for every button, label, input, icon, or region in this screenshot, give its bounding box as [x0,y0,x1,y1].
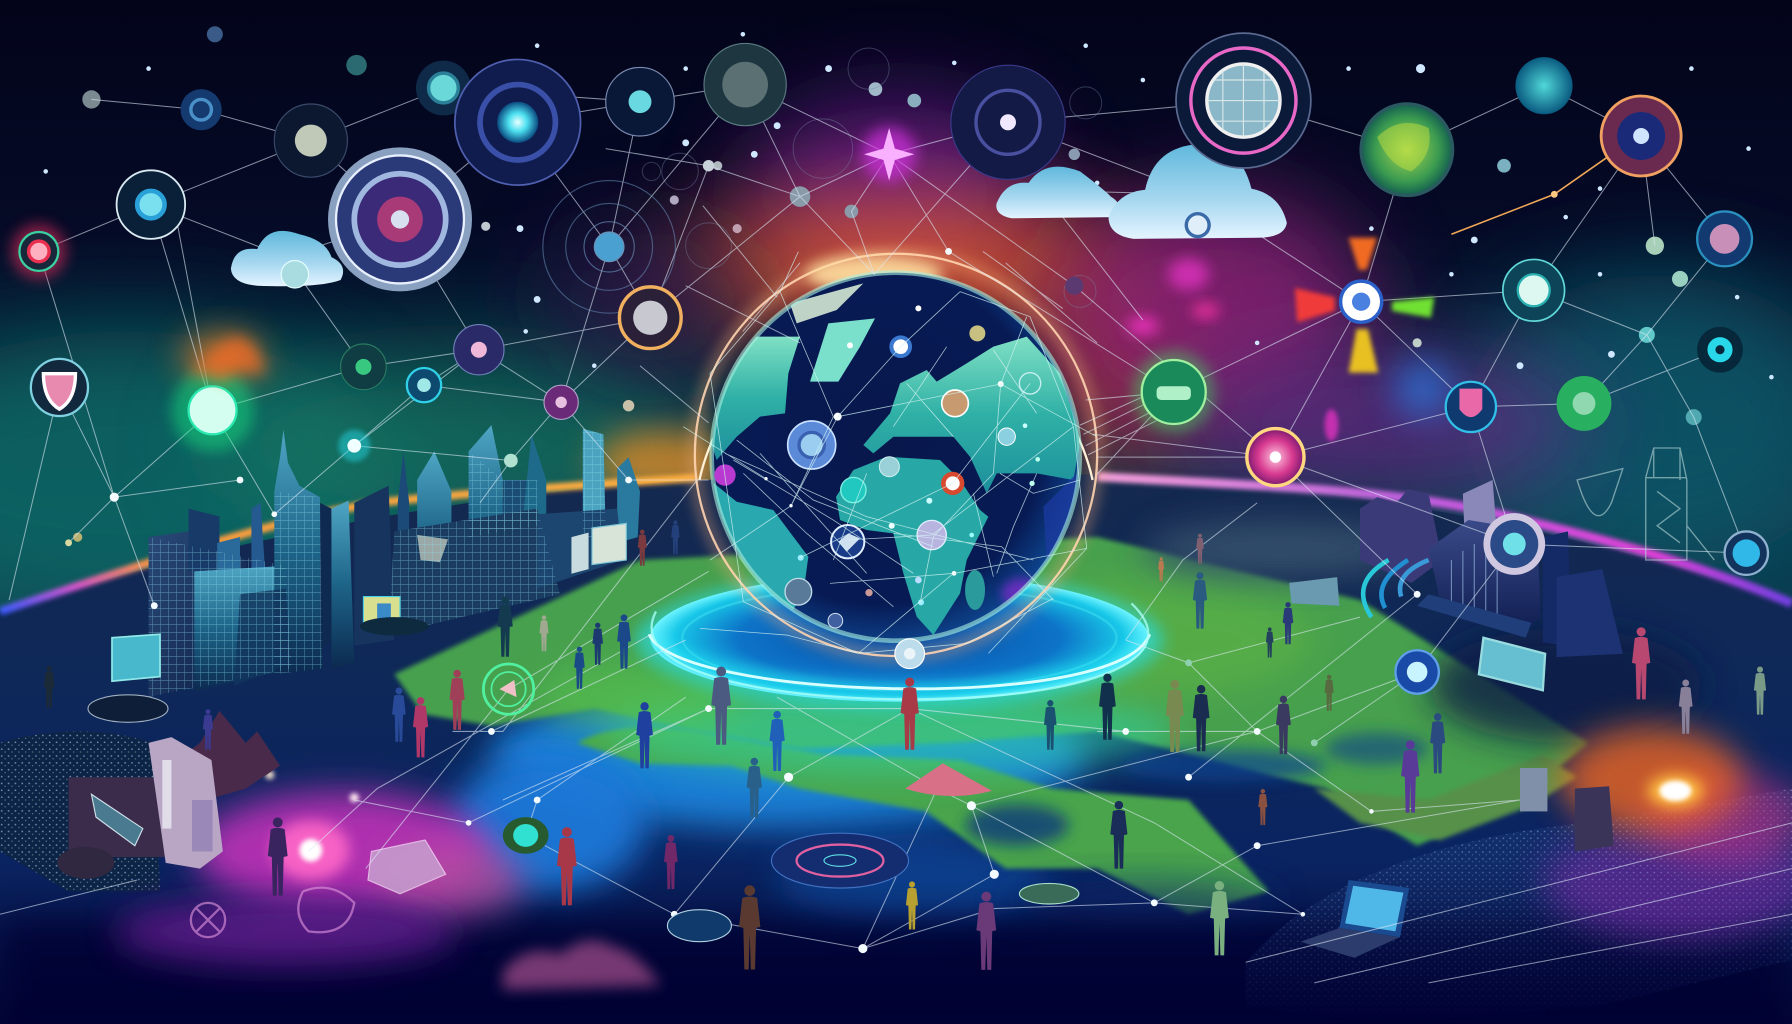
right purple glow [1543,823,1792,937]
icon: hologram floor dial [771,833,909,888]
left city skyline [149,425,640,697]
icon: shield [31,359,88,416]
server device: bottom left [57,737,223,879]
cyan signal arcs [1363,560,1429,617]
icon: grey globe [704,43,786,126]
icon: teal disc ground [503,817,549,854]
network nodes [65,160,1558,953]
icon: green globe [1361,104,1453,195]
icon: purple spark [454,325,504,375]
horizon band: right [1097,477,1792,603]
icon: small cyan node [606,67,674,136]
globe halo [695,254,1097,656]
left city window grid [149,429,606,697]
pink cloud: bottom centre [503,940,661,990]
pink dust: right [1646,771,1792,863]
icon: green dark dial [341,344,386,390]
server blocks: bottom right [1520,768,1614,851]
orange signal link [1451,154,1611,234]
icon: floor disc [667,910,731,942]
pod: magenta area [368,840,446,894]
horizon band: left [0,478,697,611]
continent: north america [710,337,800,460]
icon: cloud node left [281,261,309,288]
magenta glow landscape [114,770,526,966]
continent: south america [714,483,808,610]
sun flare: bottom right [1560,727,1743,832]
icon: pinwheel [1295,238,1434,373]
globe markers [714,305,1041,628]
icon: city lens [1483,513,1545,575]
icon: green ring ground [483,664,534,714]
icon: dark star dial [951,65,1065,179]
ground plane [0,474,1792,1024]
icon: white core node [274,104,347,177]
icon: pink badge [1247,429,1304,486]
continent: eurasia [863,337,1081,493]
left city screens [88,523,626,722]
icon: white teal node [1503,259,1565,321]
rim: east [1044,474,1076,560]
icon: green sunburst [1557,376,1611,431]
continent: madagascar [965,570,985,610]
icon: wifi marker [905,763,992,796]
base ring disc [634,569,1165,711]
icon: cloud node [1186,214,1209,237]
icon: teal node [416,61,471,115]
icon: blue dial [181,89,222,130]
sky colour glows [0,103,1792,629]
icon: orange ring node [1601,96,1681,176]
icon: cyan target [1697,327,1743,373]
icon: cyan dot [338,430,370,462]
laptop [1301,880,1409,958]
icon: white orange ring [619,287,681,349]
background stars [43,26,1774,542]
cloud: left [231,231,343,286]
left dotted hill [0,731,160,891]
icon: blue pink node [1697,211,1752,266]
icon: red ring node [11,224,66,279]
cloud: large right [1109,144,1287,239]
icon: magenta star [862,127,917,182]
mountain [154,711,280,800]
icon: grid globe ring [1176,33,1311,168]
icon: teal badge [407,368,441,402]
holographic emblems: magenta area [191,888,354,937]
wireframe tower [1577,448,1714,560]
icon: glass cyan ring [1725,531,1768,575]
icon: large turbine dial [328,147,472,291]
seat device [1289,577,1339,606]
icon: green glow node [171,369,254,451]
base ring front [649,603,1150,699]
globe [683,252,1097,653]
bottom shadow [0,920,1792,1024]
right city skyline [1360,480,1623,657]
icon: swirl node [117,170,185,239]
icon: warm flame [189,337,265,383]
icon: green badge [1133,351,1215,433]
icon: ground beacon [1395,650,1439,694]
icon: blue pink capsule [1446,382,1496,432]
continent: arctic [790,283,863,323]
dim wireframe dials [642,48,1102,307]
glass sphere [895,639,925,669]
land masses [394,520,1703,926]
cloud: middle right [996,167,1119,218]
icon: web dial [543,181,675,313]
screen panel: right [1479,638,1545,690]
continent: greenland [810,318,875,382]
icon: teal globe [1515,57,1573,114]
icon: cyan dial [455,59,581,185]
continent: africa [836,457,988,635]
right dotted hill [1246,789,1792,1024]
icon: floor plate [1019,883,1079,904]
people [44,520,1766,970]
globe network lines [683,252,1097,653]
icon: purple badge [544,385,578,419]
